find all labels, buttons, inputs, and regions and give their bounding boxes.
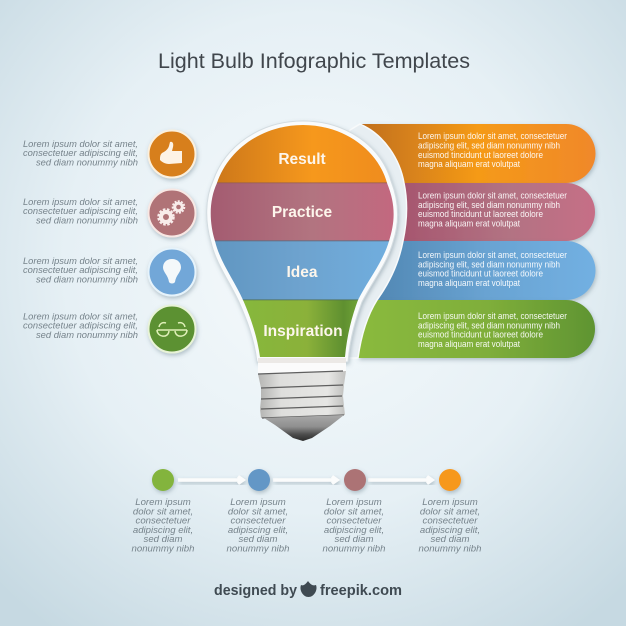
arrow 2 [273, 476, 337, 484]
step text 4: consectetuer [423, 516, 478, 526]
bulb outline [207, 121, 398, 362]
band: result: magna aliquam erat volutpat [418, 158, 520, 169]
band label: idea: Idea [286, 264, 318, 281]
step text 3: sed diam [335, 534, 373, 545]
band: idea [377, 241, 596, 300]
band: result [360, 124, 596, 183]
left list [23, 130, 196, 352]
icon: glasses [148, 306, 196, 352]
step dot: blue [248, 469, 270, 491]
step dot: green [152, 469, 174, 491]
band: practice: euismod tincidunt ut laoreet dolore [418, 208, 543, 219]
step text 3: dolor sit amet, [324, 506, 384, 518]
band: idea: Lorem ipsum dolor sit amet, consectetuer [418, 249, 567, 260]
step text 4: dolor sit amet, [420, 506, 480, 518]
text: item 2: Lorem ipsum dolor sit amet, [23, 196, 138, 207]
band: inspiration: Lorem ipsum dolor sit amet, consectetuer [418, 310, 567, 321]
timeline [132, 469, 481, 554]
band: result: Lorem ipsum dolor sit amet, consectetuer [418, 130, 567, 141]
step dot: orange [439, 469, 461, 491]
step text 1: nonummy nibh [132, 544, 194, 554]
bulb screw base [258, 358, 346, 441]
text: item 2 [23, 196, 138, 226]
step text 4: sed diam [431, 534, 469, 545]
bulb glass bands [205, 122, 400, 357]
step text 4: nonummy nibh [419, 544, 481, 554]
arrow 1 [178, 476, 243, 484]
band: practice: adipiscing elit, sed diam nonummy nibh [418, 199, 560, 210]
step text 3: nonummy nibh [323, 544, 385, 554]
icon: freepik logo [300, 581, 317, 597]
step text 2: adipiscing elit, [228, 525, 288, 536]
footer credit [214, 581, 402, 599]
text: item 3 [23, 255, 138, 284]
step text 1: adipiscing elit, [133, 525, 193, 536]
band label: practice: Practice [272, 204, 333, 221]
step text 2: consectetuer [231, 516, 286, 526]
title: Light Bulb Infographic Templates [158, 50, 470, 73]
step text 2: dolor sit amet, [228, 506, 288, 518]
step text 1: dolor sit amet, [133, 506, 193, 518]
band label: inspiration: Inspiration [263, 323, 343, 340]
step text 3 [323, 497, 385, 554]
icon: gears [148, 190, 196, 236]
text: item 4: Lorem ipsum dolor sit amet, [23, 310, 138, 322]
band: idea: euismod tincidunt ut laoreet dolore [418, 268, 543, 278]
footer credit: designed by [214, 583, 297, 599]
text: item 4: sed diam nonummy nibh [36, 329, 138, 340]
icon: thumbs up [148, 130, 196, 178]
text: item 4 [23, 310, 138, 340]
step text 2 [227, 497, 289, 554]
band: result: euismod tincidunt ut laoreet dolore [418, 149, 543, 160]
text: item 1: consectetuer adipiscing elit, [23, 147, 138, 158]
icon: light bulb [148, 248, 196, 296]
step text 4 [419, 497, 481, 554]
step text 4: Lorem ipsum [422, 497, 478, 508]
text: item 1: sed diam nonummy nibh [36, 156, 138, 168]
band: inspiration: adipiscing elit, sed diam nonummy nibh [418, 320, 560, 330]
text: item 1 [23, 138, 138, 168]
text: item 3: consectetuer adipiscing elit, [23, 264, 138, 275]
text: item 2: sed diam nonummy nibh [36, 214, 138, 226]
step text 1: Lorem ipsum [135, 497, 191, 508]
text: item 4: consectetuer adipiscing elit, [23, 320, 138, 330]
step text 2: sed diam [239, 534, 277, 545]
text: item 1: Lorem ipsum dolor sit amet, [23, 138, 138, 149]
step text 2: Lorem ipsum [230, 497, 286, 508]
panel: right text bands [358, 124, 596, 358]
band: inspiration: euismod tincidunt ut laoreet dolore [418, 328, 543, 340]
step text 4: adipiscing elit, [420, 525, 480, 536]
step text 1 [132, 497, 194, 554]
halo between bulb and bands [345, 124, 407, 358]
step text 1: sed diam [144, 534, 182, 545]
text: item 2: consectetuer adipiscing elit, [23, 205, 138, 216]
text: item 3: Lorem ipsum dolor sit amet, [23, 255, 138, 266]
band: practice: Lorem ipsum dolor sit amet, consectetuer [418, 190, 567, 200]
band label: result: Result [278, 151, 326, 168]
step text 2: nonummy nibh [227, 544, 289, 554]
step text 3: adipiscing elit, [324, 525, 384, 536]
band: idea: magna aliquam erat volutpat [418, 277, 520, 288]
arrow 3 [368, 476, 432, 484]
step text 1: consectetuer [136, 516, 191, 526]
band: practice [403, 183, 595, 241]
text: item 3: sed diam nonummy nibh [36, 274, 138, 284]
footer credit: freepik.com [320, 583, 402, 599]
band: result: adipiscing elit, sed diam nonummy nibh [418, 140, 560, 150]
step dot: rose [344, 469, 366, 491]
band: idea: adipiscing elit, sed diam nonummy nibh [418, 258, 560, 270]
band: inspiration: magna aliquam erat volutpat [418, 338, 520, 349]
band: inspiration [358, 300, 595, 358]
step text 3: consectetuer [327, 516, 382, 526]
step text 3: Lorem ipsum [326, 497, 382, 508]
band: practice: magna aliquam erat volutpat [418, 218, 520, 228]
light bulb [205, 121, 400, 441]
